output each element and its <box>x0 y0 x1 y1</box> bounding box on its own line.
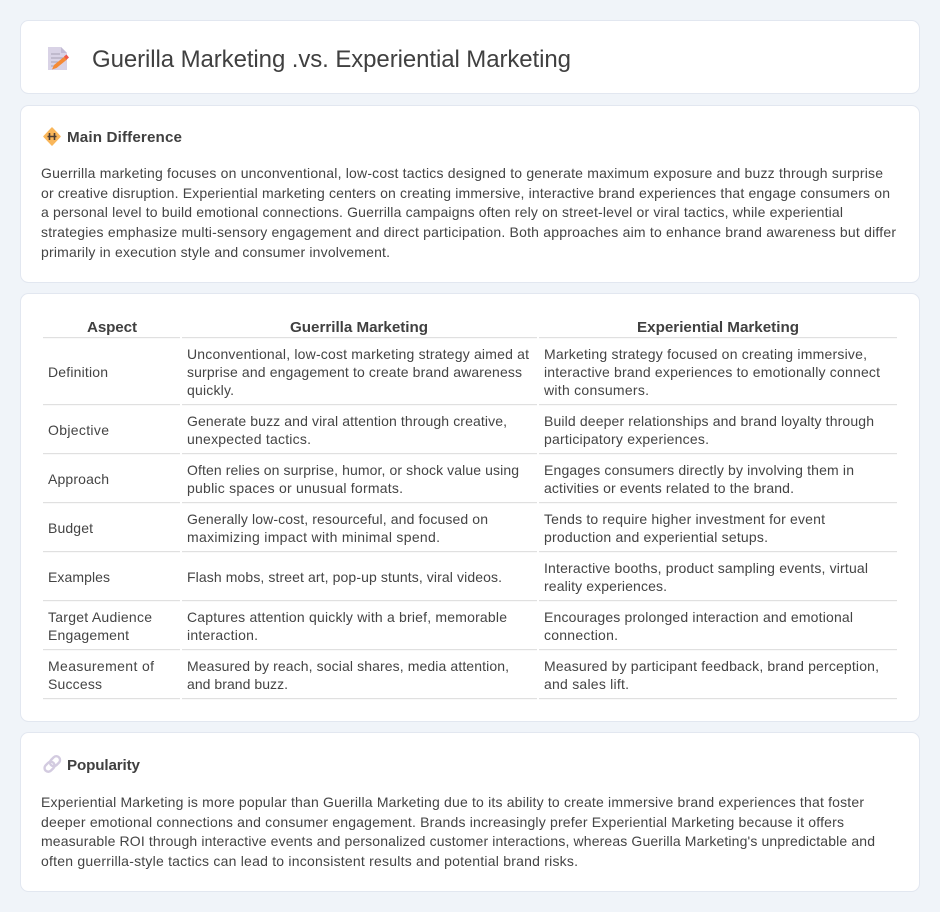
table header: Experiential Marketing <box>637 319 799 336</box>
row: examples: Examples <box>48 569 110 585</box>
table header <box>87 319 799 336</box>
row: objective <box>48 413 874 447</box>
row: budget: Tends to require higher investment for event <box>544 511 825 527</box>
row: definition: Marketing strategy focused on creating immersive, <box>544 346 867 362</box>
panel: popularity <box>20 732 920 892</box>
row: approach: Engages consumers directly by involving them in <box>544 462 854 478</box>
text block: main difference body: strategies emphasize multi-sensory engagement and direct participation. Both approaches aim to enhance brand awareness but differ <box>41 224 896 240</box>
row: budget <box>48 511 825 545</box>
row: target audience engagement <box>48 609 853 643</box>
row: budget: maximizing impact with minimal spend. <box>187 529 440 545</box>
row: objective: Generate buzz and viral attention through creative, <box>187 413 507 429</box>
row: approach: Approach <box>48 471 109 487</box>
icon: chain link <box>43 755 62 773</box>
row: budget: production and experiential setups. <box>544 529 768 545</box>
row: measurement of success <box>48 658 879 692</box>
row: measurement of success: Success <box>48 676 102 692</box>
row: approach: Often relies on surprise, humor, or shock value using <box>187 462 519 478</box>
row: target audience engagement: Engagement <box>48 627 129 643</box>
row: examples: Interactive booths, product sampling events, virtual <box>544 560 868 576</box>
row: definition: Unconventional, low-cost marketing strategy aimed at <box>187 346 529 362</box>
row: approach <box>48 462 854 496</box>
row: target audience engagement: Encourages prolonged interaction and emotional <box>544 609 853 625</box>
row: target audience engagement: Captures attention quickly with a brief, memorable <box>187 609 507 625</box>
text block: main difference body: a personal level to build emotional connections. Guerrilla campaigns often rely on street-level or viral tactics, while experiential <box>41 204 843 220</box>
panel: title header <box>20 20 920 94</box>
row: objective: participatory experiences. <box>544 431 709 447</box>
row: measurement of success: Measured by participant feedback, brand perception, <box>544 658 879 674</box>
row: definition: Definition <box>48 364 108 380</box>
icon: warning diamond <box>44 128 60 145</box>
row: objective: Build deeper relationships and brand loyalty through <box>544 413 874 429</box>
table header: Guerrilla Marketing <box>290 319 428 336</box>
icon: document with pencil <box>48 47 69 70</box>
text block: popularity body: deeper emotional connections and consumer engagement. Brands increasingly prefer Experiential Marketing because it offers <box>41 814 844 830</box>
row: budget: Budget <box>48 520 93 536</box>
row: definition: with consumers. <box>543 382 649 398</box>
row: target audience engagement: interaction. <box>187 627 258 643</box>
row: target audience engagement: connection. <box>544 627 618 643</box>
row: approach: public spaces or unusual formats. <box>187 480 403 496</box>
title: Guerilla Marketing .vs. Experiential Marketing <box>92 46 571 73</box>
row: examples: reality experiences. <box>544 578 667 594</box>
text block: popularity body: measurable ROI through interactive events and personalized customer interactions, whereas Guerilla Marketing's unpredictable and <box>41 833 875 849</box>
row: examples: Flash mobs, street art, pop-up stunts, viral videos. <box>187 569 502 585</box>
table header: Aspect <box>87 319 137 336</box>
text block: main difference body: Guerrilla marketing focuses on unconventional, low-cost tactics designed to generate maximum exposure and buzz through surprise <box>41 165 883 181</box>
text block: popularity body: often guerrilla-style tactics can lead to inconsistent results and potential brand risks. <box>41 853 578 869</box>
row: definition: interactive brand experiences to emotionally connect <box>544 364 880 380</box>
text block: main difference body <box>41 165 896 260</box>
row: examples <box>48 560 868 594</box>
text block: popularity body: Experiential Marketing is more popular than Guerilla Marketing due to its ability to create immersive brand experiences that foster <box>41 794 864 810</box>
row: approach: activities or events related to the brand. <box>544 480 794 496</box>
row: measurement of success: Measured by reach, social shares, media attention, <box>187 658 509 674</box>
heading: main difference: Main Difference <box>67 129 182 146</box>
row: objective: unexpected tactics. <box>187 431 311 447</box>
row: definition: surprise and engagement to create brand awareness <box>187 364 522 380</box>
heading: popularity: Popularity <box>67 757 141 774</box>
row: objective: Objective <box>48 422 109 438</box>
row: measurement of success: Measurement of <box>48 658 154 674</box>
row: measurement of success: and brand buzz. <box>187 676 288 692</box>
text block: main difference body: primarily in execution style and consumer involvement. <box>41 244 390 260</box>
panel: comparison table <box>20 294 920 722</box>
text block: main difference body: or creative disruption. Experiential marketing centers on creating immersive, interactive brand experiences that engage consumers on <box>41 185 890 201</box>
row: target audience engagement: Target Audience <box>48 609 152 625</box>
row: measurement of success: and sales lift. <box>544 676 629 692</box>
panel: main difference <box>20 106 920 282</box>
row: definition <box>48 346 880 398</box>
text block: popularity body <box>41 794 875 869</box>
row: budget: Generally low-cost, resourceful, and focused on <box>187 511 488 527</box>
row: definition: quickly. <box>187 382 234 398</box>
